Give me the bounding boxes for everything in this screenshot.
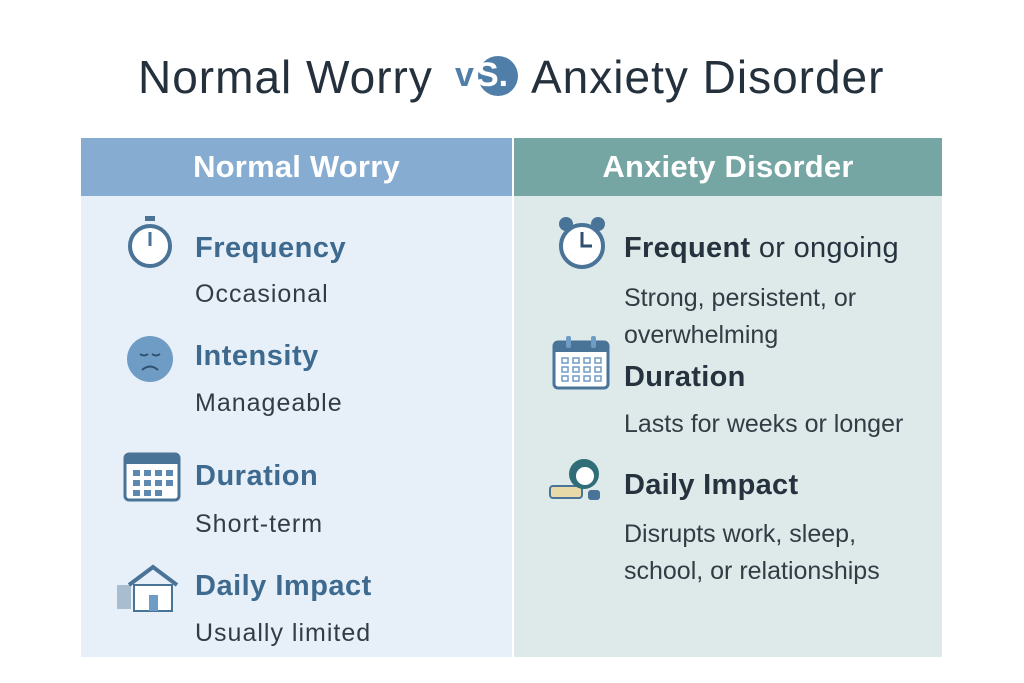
icon: person with books [549,459,600,500]
heading: anxiety disorder [514,138,942,196]
panel: normal worry: Occasional [195,280,329,308]
panel: normal worry: Usually limited [195,619,371,647]
title: Anxiety Disorder [531,51,884,103]
text: frequency: Frequency [195,232,346,264]
text: daily impact: Daily Impact [624,469,798,501]
icon: calendar [552,336,610,390]
text: intensity: Intensity [195,340,319,372]
panel: anxiety disorder: school, or relationships [624,557,880,585]
panel: anxiety disorder [514,138,942,657]
panel: normal worry: Manageable [195,389,343,417]
text: daily impact: Daily Impact [195,570,372,602]
text: duration: Duration [195,460,318,492]
icon: calendar [124,452,180,502]
icon: house [117,564,178,612]
heading: normal worry: Normal Worry [193,149,400,184]
heading: normal worry [81,138,512,196]
panel: anxiety disorder: overwhelming [624,321,778,349]
panel: normal worry: Short-term [195,510,323,538]
text: duration: Duration [624,361,746,393]
heading: anxiety disorder: Anxiety Disorder [602,149,854,184]
icon: vs badge [455,56,518,96]
title: Normal Worry [138,51,433,103]
icon: vs badge: v [455,56,474,94]
panel: anxiety disorder: Disrupts work, sleep, [624,520,856,548]
icon: vs badge: S. [476,56,508,94]
panel: anxiety disorder: Strong, persistent, or [624,284,856,312]
title [138,51,884,103]
text: frequent: Frequent or ongoing [624,232,899,264]
icon: alarm clock [559,217,605,269]
icon: stopwatch [128,216,172,268]
panel: anxiety disorder: Lasts for weeks or longer [624,410,903,438]
panel: normal worry [81,138,512,657]
icon: sad face [127,336,173,382]
